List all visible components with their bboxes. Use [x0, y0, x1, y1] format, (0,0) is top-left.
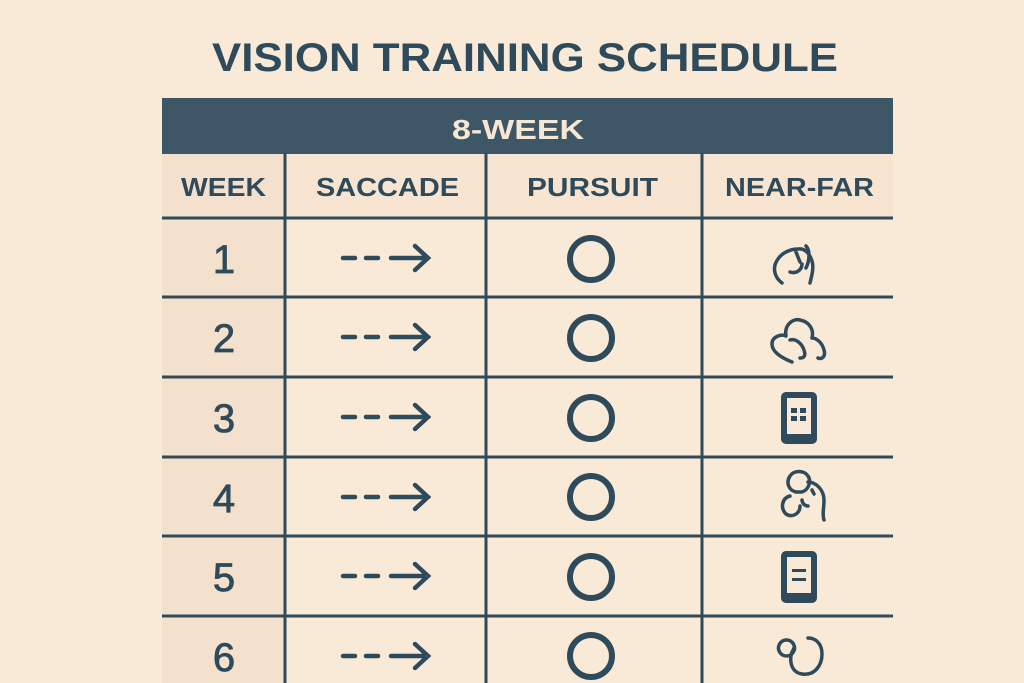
- column headers: [181, 172, 874, 202]
- week numbers: 3: [213, 397, 235, 441]
- header bar: 8-WEEK: [452, 114, 584, 145]
- table: [162, 98, 893, 683]
- near-far icons: [772, 246, 825, 674]
- week numbers: 6: [213, 636, 235, 680]
- icon: tablet grid: [781, 392, 817, 444]
- icon: hand 4: [783, 472, 824, 520]
- week numbers: [213, 238, 235, 680]
- column headers: WEEK: [181, 172, 266, 202]
- week numbers: 4: [213, 477, 235, 521]
- column headers: PURSUIT: [527, 172, 658, 202]
- week numbers: 5: [213, 556, 235, 600]
- icon: loop: [778, 638, 822, 674]
- saccade arrows: [343, 246, 428, 668]
- title: VISION TRAINING SCHEDULE: [212, 36, 838, 80]
- pursuit circles: [570, 238, 612, 677]
- week numbers: 1: [213, 238, 235, 282]
- icon: hand 2: [772, 320, 825, 362]
- icon: hand 1: [775, 246, 813, 283]
- column headers: SACCADE: [316, 172, 459, 202]
- column headers: NEAR-FAR: [725, 172, 874, 202]
- week numbers: 2: [213, 317, 235, 361]
- icon: tablet lines: [781, 551, 817, 603]
- header bar: [162, 98, 893, 154]
